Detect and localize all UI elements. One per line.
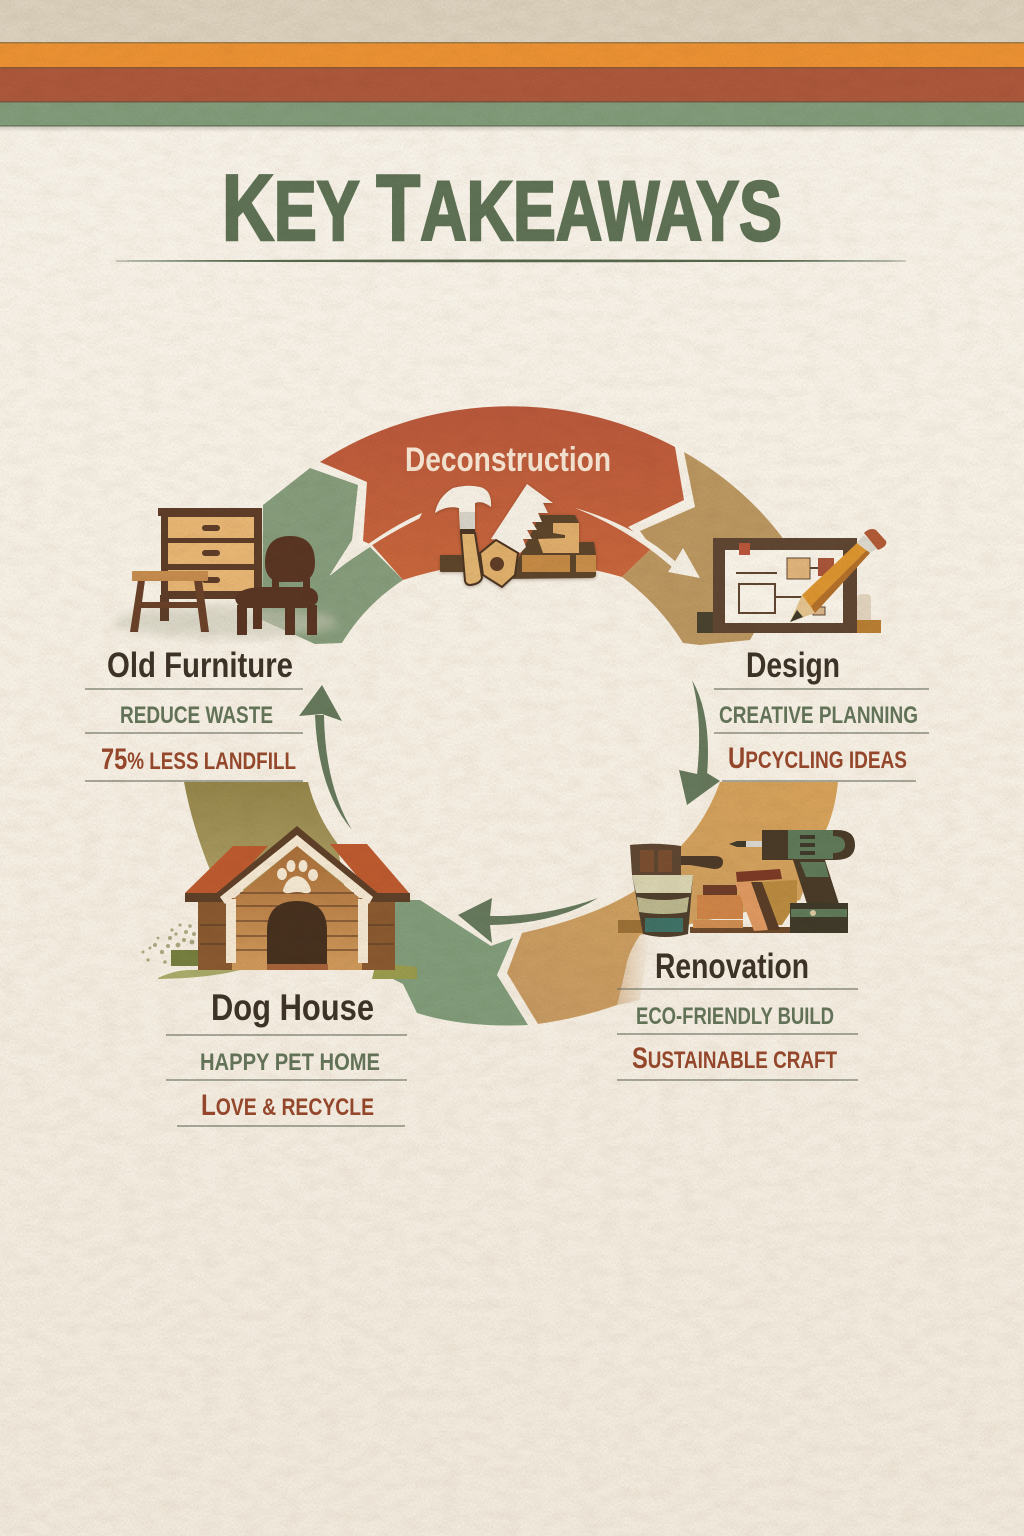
roof left (185, 846, 268, 893)
gable dark (208, 826, 386, 902)
text: sustainable craft: SUSTAINABLE CRAFT (632, 1042, 837, 1075)
white crack on red (330, 514, 421, 575)
plan details (736, 543, 834, 615)
torn wash: renovation (617, 935, 650, 1005)
text: happy pet home: HAPPY PET HOME (200, 1049, 380, 1076)
drill (729, 830, 855, 933)
floor plank (618, 920, 792, 933)
speckled dirt (142, 923, 196, 964)
paw print (277, 860, 318, 893)
arrow: renovation to dog house (458, 898, 598, 943)
door (267, 901, 327, 964)
text: eco-friendly build: ECO-FRIENDLY BUILD (636, 1003, 834, 1030)
gable trim (220, 835, 373, 904)
label: old furniture (85, 646, 303, 781)
heading: Dog House (211, 987, 374, 1028)
floor shadow (113, 606, 337, 638)
segment: bottom green (385, 900, 528, 1026)
roof right (330, 844, 410, 894)
chair (235, 536, 318, 635)
title underline (116, 260, 906, 262)
side walls (198, 898, 395, 970)
segment: design (622, 452, 790, 645)
pencil (790, 529, 886, 622)
segment: deconstruction (320, 406, 684, 580)
eaves (185, 893, 410, 902)
dresser (158, 508, 262, 621)
text: upcycling ideas: UPCYCLING IDEAS (728, 742, 907, 775)
icon: tools and bricks (435, 484, 596, 587)
top colour bands (0, 0, 1024, 132)
rules (166, 1035, 407, 1126)
label: design (714, 646, 929, 781)
leaning planks (735, 869, 797, 931)
heading: Renovation (655, 947, 809, 986)
text: creative planning: CREATIVE PLANNING (719, 702, 918, 729)
arrow: design to renovation (679, 680, 720, 805)
frame (713, 538, 857, 633)
threshold (267, 964, 328, 970)
hammer (435, 486, 491, 585)
heading: Design (746, 646, 840, 685)
base blocks (697, 612, 881, 633)
white arrow to design (575, 508, 700, 578)
sheet (725, 550, 843, 623)
paint bucket (632, 875, 693, 937)
stool (130, 571, 209, 632)
segment: old furniture (262, 468, 403, 644)
mallet (630, 844, 723, 875)
rules (617, 989, 858, 1080)
label: renovation (617, 947, 858, 1080)
icon: renovation tools (618, 830, 855, 937)
rules (714, 689, 929, 781)
icon: design board (697, 529, 886, 633)
title: KEY TAKEAWAYS (222, 155, 782, 260)
wall planks (200, 925, 394, 944)
text: less landfill: 75% LESS LANDFILL (101, 743, 296, 776)
text: reduce waste: REDUCE WASTE (120, 702, 273, 729)
arrow: dog house to furniture (299, 685, 352, 830)
posts (226, 899, 368, 963)
cycle ring (184, 406, 838, 1026)
grass patches (158, 950, 417, 979)
front planks (236, 893, 358, 950)
bricks (440, 515, 596, 579)
icon: old furniture (113, 508, 337, 638)
icon: dog house (142, 826, 417, 979)
front wall (232, 846, 362, 970)
segment: renovation (507, 782, 838, 1024)
rules (85, 689, 303, 781)
segment: dog house (184, 782, 345, 890)
board shadow (857, 594, 871, 622)
brick stack (693, 885, 743, 928)
text: love and recycle: LOVE & RECYCLE (201, 1089, 374, 1122)
label: dog house (166, 987, 407, 1126)
heading: Old Furniture (107, 646, 293, 685)
heading: deconstruction: Deconstruction (405, 441, 611, 479)
saw (480, 484, 553, 587)
